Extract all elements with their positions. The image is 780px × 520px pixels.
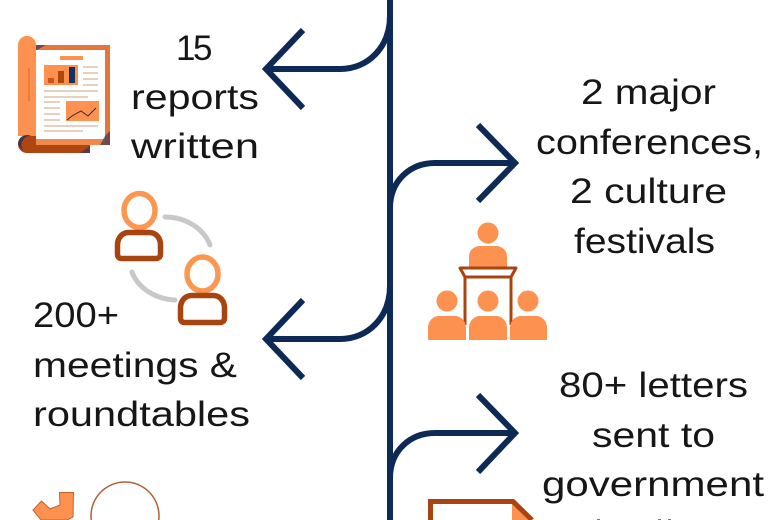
label: letters sent: 80+ letters: [559, 366, 748, 405]
icon: puzzle piece: [33, 492, 74, 520]
icon: report: [18, 36, 110, 153]
label: letters sent: government: [542, 465, 764, 504]
arrow: letters: [390, 395, 515, 478]
icon: letter document: [430, 502, 532, 520]
label: meetings and roundtables: roundtables: [33, 395, 250, 434]
timeline spine: [387, 0, 393, 520]
clipped ascenders of next text line: [597, 519, 671, 520]
label: meetings and roundtables: 200+: [33, 296, 119, 335]
label: 15 reports written: 15: [176, 29, 212, 68]
arrow: meetings: [266, 286, 390, 378]
label: letters sent: sent to: [592, 416, 715, 455]
icon: circle outline: [91, 482, 159, 520]
icon: meeting people: [118, 194, 224, 322]
icon: podium audience: [428, 222, 547, 340]
label: meetings and roundtables: [33, 296, 250, 434]
label: conferences and festivals: [536, 73, 763, 261]
label: 15 reports written: written: [130, 127, 259, 166]
label: conferences and festivals: 2 culture: [570, 172, 727, 211]
label: conferences and festivals: conferences,: [536, 123, 763, 162]
label: meetings and roundtables: meetings &: [33, 346, 237, 385]
label: 15 reports written: [130, 29, 259, 166]
label: 15 reports written: reports: [131, 78, 259, 117]
arrow: conferences: [390, 125, 515, 208]
label: conferences and festivals: festivals: [574, 222, 715, 261]
label: letters sent: [542, 366, 764, 504]
label: conferences and festivals: 2 major: [581, 73, 716, 112]
arrow: reports: [266, 16, 390, 108]
